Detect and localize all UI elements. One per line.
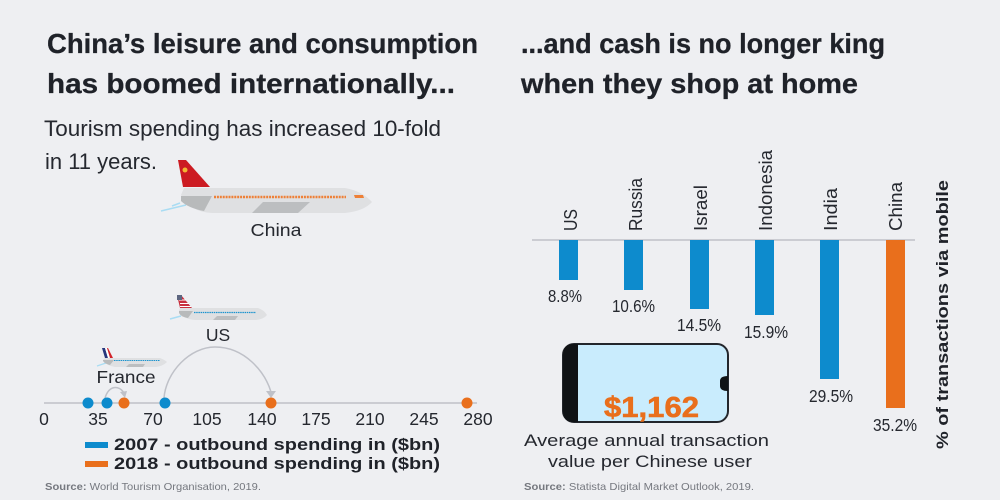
value labels: 15.9% [744, 322, 788, 342]
data points [82, 398, 472, 408]
caption: average annual transaction: value per Chinese user [548, 452, 752, 471]
icon: China plane [161, 160, 372, 213]
number line axis [44, 347, 477, 408]
value labels: 8.8% [548, 286, 582, 306]
caption: average annual transaction: Average annual transaction [524, 431, 769, 450]
legend: 2007 - outbound spending in ($bn) [114, 436, 440, 454]
caption: average annual transaction [524, 431, 769, 471]
text block: tourism spending: Tourism spending has increased 10-fold [44, 116, 441, 141]
bar chart: mobile transactions [532, 149, 917, 435]
icon: US plane [170, 295, 267, 320]
country labels: Russia [625, 177, 646, 231]
title: left heading: has boomed internationally... [47, 68, 455, 99]
title: left heading: China’s leisure and consumption [47, 28, 478, 59]
value labels: 10.6% [612, 296, 655, 316]
label: US: US [206, 325, 230, 345]
value labels: 29.5% [809, 386, 853, 406]
title: right heading: ...and cash is no longer king [521, 28, 885, 59]
value labels: 35.2% [873, 415, 917, 435]
legend: 2018 - outbound spending in ($bn) [114, 455, 440, 473]
axis tick labels: 210 [355, 409, 385, 429]
text block: tourism spending [44, 116, 441, 174]
label: China: China [250, 220, 302, 240]
source: left: Source: World Tourism Organisation, 2019. [45, 481, 261, 493]
value labels: 14.5% [677, 315, 721, 335]
axis title: mobile: % of transactions via mobile [934, 180, 952, 449]
country labels: Israel [690, 185, 711, 231]
axis tick labels: 0 [39, 409, 49, 429]
axis tick labels [39, 409, 493, 429]
axis tick labels: 175 [301, 409, 331, 429]
legend [85, 436, 440, 473]
axis tick labels: 280 [463, 409, 493, 429]
axis tick labels: 35 [88, 409, 108, 429]
value: $1,162 [604, 392, 699, 424]
axis tick labels: 105 [192, 409, 222, 429]
axis tick labels: 70 [143, 409, 163, 429]
country labels: Indonesia [755, 149, 776, 231]
icon: phone with value [563, 344, 728, 424]
title: left heading [47, 28, 478, 99]
icon: France plane [97, 348, 167, 367]
country labels: US [560, 209, 581, 231]
country labels [560, 149, 906, 231]
text block: tourism spending: in 11 years. [45, 149, 157, 174]
arrow: France growth [105, 388, 127, 398]
source: right: Source: Statista Digital Market Outlook, 2019. [524, 481, 754, 493]
bars [559, 240, 905, 408]
value labels [548, 286, 917, 435]
country labels: China [885, 181, 906, 231]
axis tick labels: 245 [409, 409, 439, 429]
title: right heading [520, 28, 885, 99]
country labels: India [820, 187, 841, 231]
arrow: US growth [164, 347, 276, 398]
title: right heading: when they shop at home [520, 68, 858, 99]
axis tick labels: 140 [247, 409, 277, 429]
label: France: France [96, 367, 156, 387]
